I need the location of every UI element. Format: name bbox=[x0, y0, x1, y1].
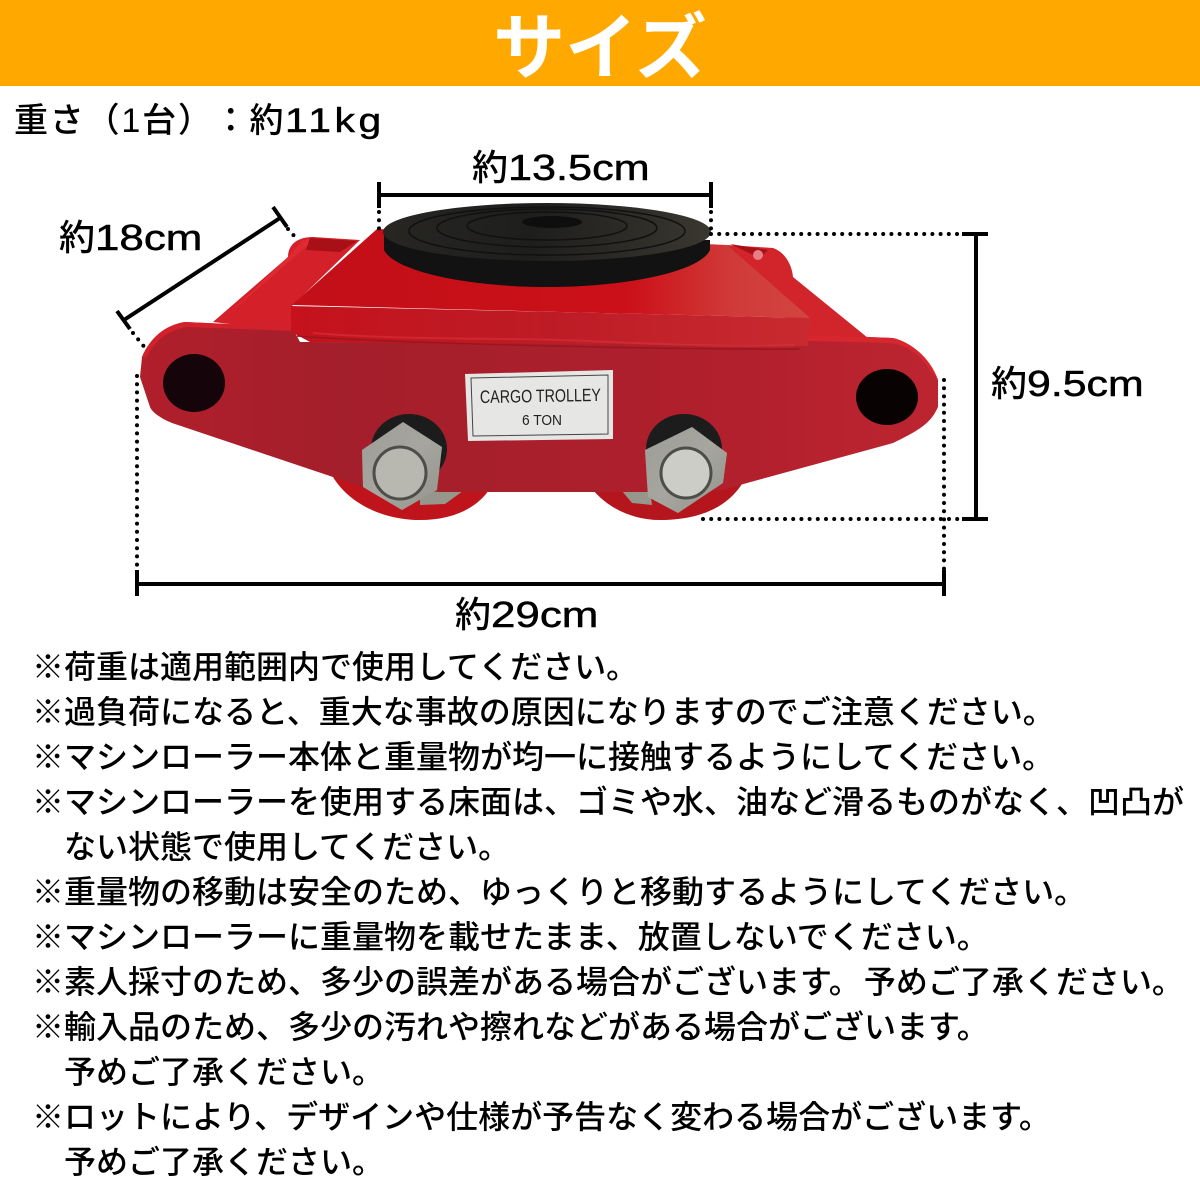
dimension guide dots bbox=[133, 212, 958, 575]
weight label: 重さ（1台）：約 bbox=[14, 102, 285, 140]
mounting holes bbox=[163, 354, 918, 425]
dimension: 13.5cm bbox=[379, 182, 711, 208]
notes list: ※輸入品のため、多少の汚れや擦れなどがある場合がございます。 bbox=[32, 1002, 989, 1048]
label 13.5cm: 約 bbox=[472, 147, 508, 188]
notes list: 予めご了承ください。 bbox=[64, 1047, 384, 1093]
notes list: ない状態で使用してください。 bbox=[64, 822, 510, 868]
rear bars bbox=[213, 237, 868, 340]
nameplate bbox=[465, 370, 613, 441]
label 9.5cm: 9.5cm bbox=[1027, 363, 1144, 404]
label 18cm: 約 bbox=[59, 217, 95, 258]
header band bbox=[0, 0, 1200, 86]
notes list: ※マシンローラーを使用する床面は、ゴミや水、油など滑るものがなく、凹凸が bbox=[32, 777, 1184, 823]
dimension: 29cm bbox=[137, 570, 944, 596]
label 29cm: 29cm bbox=[491, 594, 598, 635]
notes list: ※マシンローラーに重量物を載せたまま、放置しないでください。 bbox=[32, 912, 989, 958]
rollers bbox=[333, 477, 742, 520]
dimension: 9.5cm bbox=[962, 234, 988, 519]
label 18cm: 18cm bbox=[95, 217, 202, 258]
nameplate: 6 TON bbox=[522, 412, 562, 429]
notes list bbox=[32, 642, 1184, 1183]
right bolt bbox=[645, 414, 727, 513]
notes list: ※過負荷になると、重大な事故の原因になりますのでご注意ください。 bbox=[32, 687, 1055, 733]
label 13.5cm: 13.5cm bbox=[508, 147, 650, 188]
product diagram bbox=[115, 182, 988, 596]
label 29cm: 約 bbox=[455, 594, 491, 635]
weight label: 11kg bbox=[285, 102, 385, 140]
top plate bbox=[291, 229, 810, 349]
side plate bbox=[140, 322, 938, 492]
label 9.5cm: 約 bbox=[991, 363, 1027, 404]
notes list: ※ロットにより、デザインや仕様が予告なく変わる場合がございます。 bbox=[32, 1092, 1051, 1138]
turntable disc bbox=[383, 203, 711, 287]
nameplate: CARGO TROLLEY bbox=[480, 385, 601, 407]
dimension: 18cm bbox=[117, 207, 287, 329]
notes list: ※マシンローラー本体と重量物が均一に接触するようにしてください。 bbox=[32, 732, 1054, 778]
left bolt bbox=[362, 414, 447, 510]
notes list: ※重量物の移動は安全のため、ゆっくりと移動するようにしてください。 bbox=[32, 867, 1086, 913]
notes list: 予めご了承ください。 bbox=[64, 1137, 384, 1183]
notes list: ※素人採寸のため、多少の誤差がある場合がございます。予めご了承ください。 bbox=[32, 957, 1184, 1003]
notes list: ※荷重は適用範囲内で使用してください。 bbox=[32, 642, 638, 688]
